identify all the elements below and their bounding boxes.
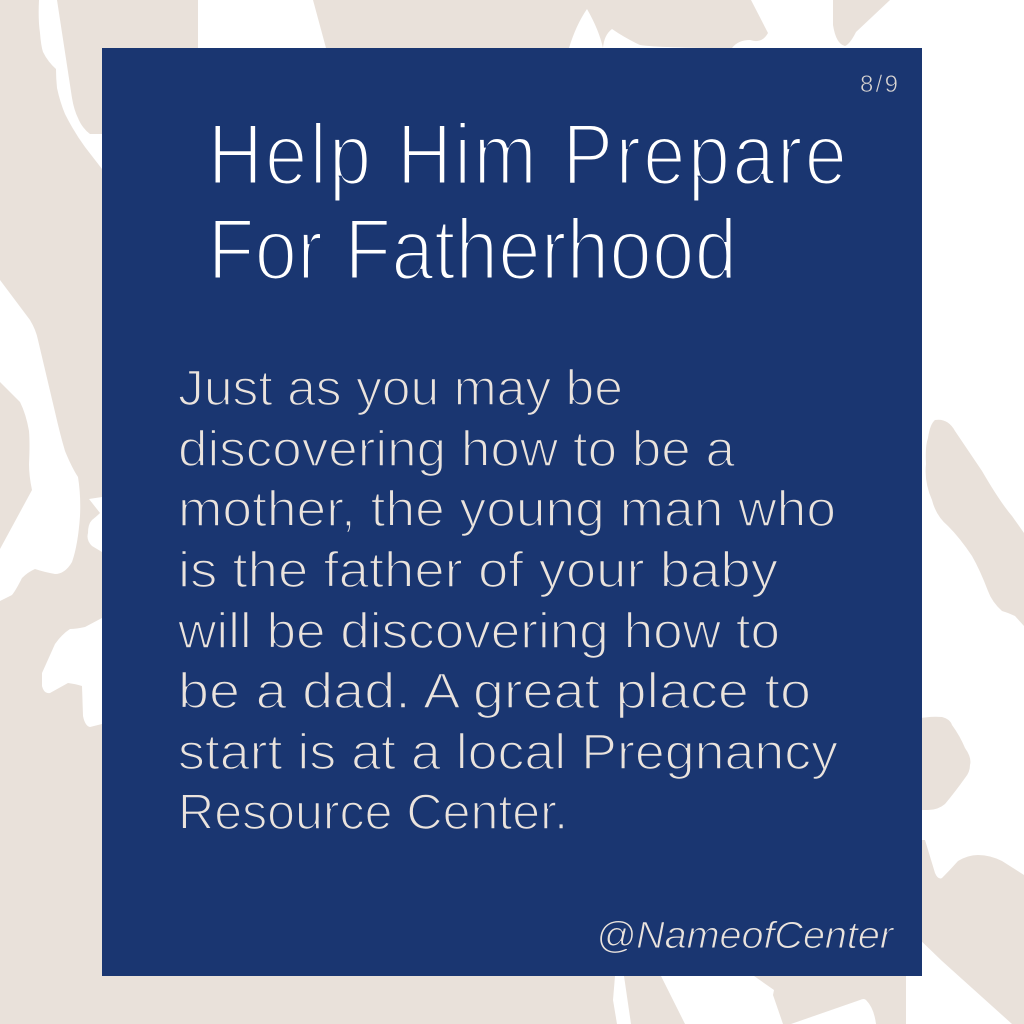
title: For Fatherhood [208, 203, 737, 298]
body text: is the father of your baby [178, 542, 778, 598]
body text: Resource Center. [178, 784, 568, 840]
title [208, 108, 847, 298]
body text: start is at a local Pregnancy [178, 724, 838, 780]
body text [177, 360, 838, 840]
social handle: @NameofCenter [596, 915, 894, 957]
body text: mother, the young man who [178, 481, 836, 537]
body text: will be discovering how to [177, 603, 780, 659]
title: Help Him Prepare [208, 108, 847, 203]
body text: Just as you may be [178, 360, 623, 416]
page number: 8/9 [860, 71, 898, 98]
body text: be a dad. A great place to [178, 663, 811, 719]
panel: navy content card [102, 48, 922, 976]
body text: discovering how to be a [178, 421, 735, 477]
